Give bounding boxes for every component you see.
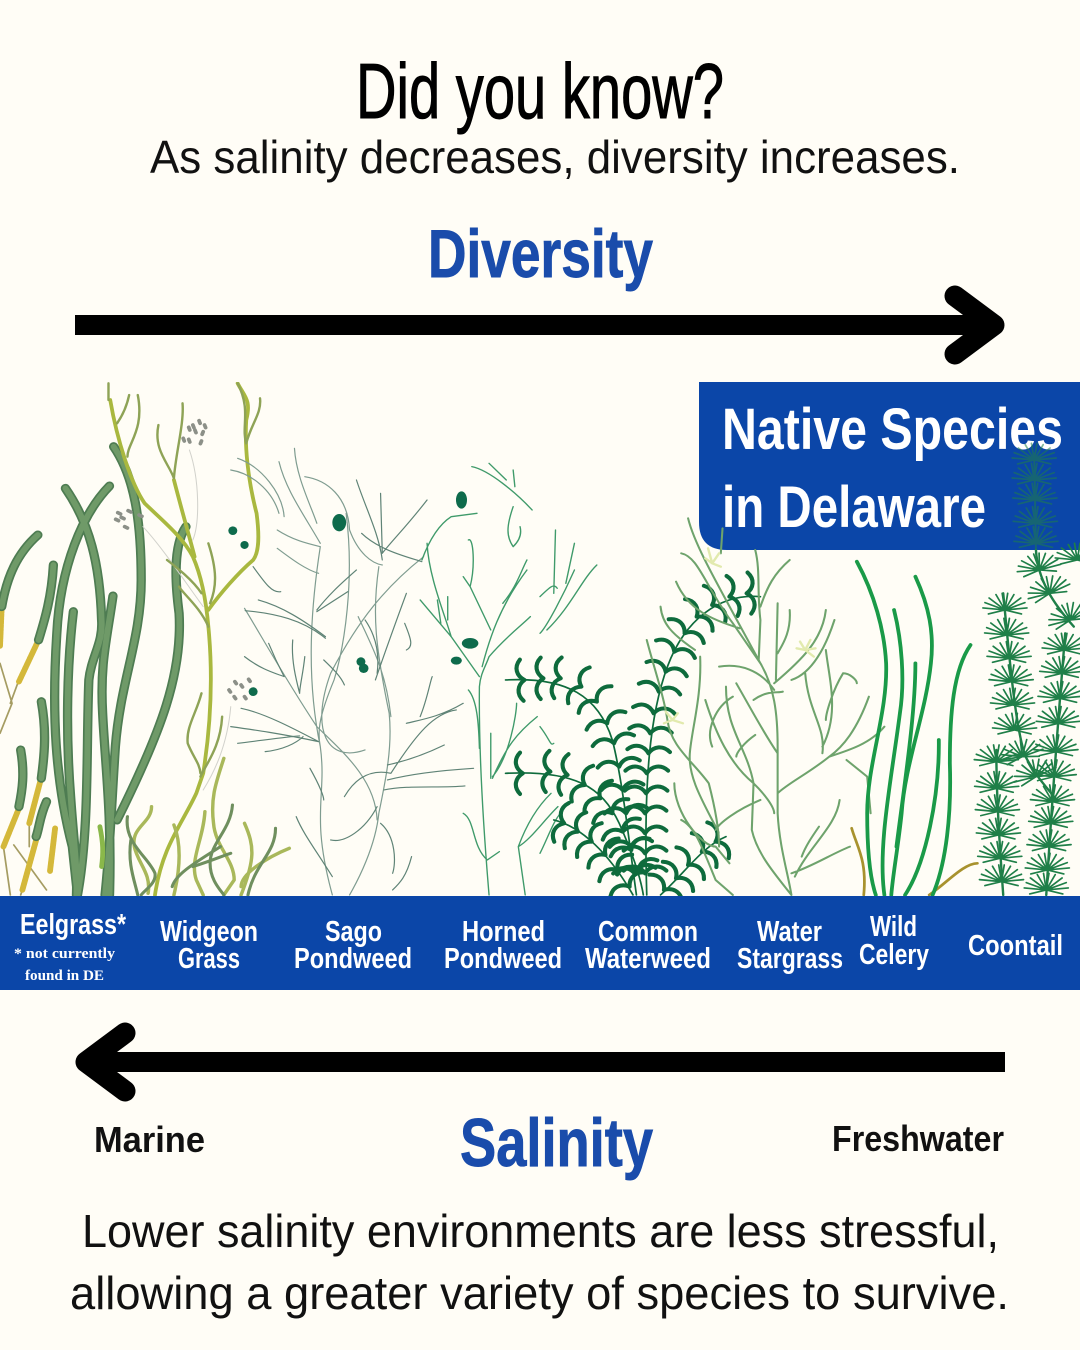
- plant: horned pondweed: [420, 463, 558, 895]
- subtitle: As salinity decreases, diversity increases.: [150, 131, 960, 183]
- plant: common waterweed: [506, 572, 760, 903]
- panel: species labels band: [0, 896, 1080, 990]
- banner heading: in Delaware: [722, 475, 986, 540]
- label: sago pondweed: [294, 916, 412, 975]
- label: eelgrass: [14, 909, 127, 984]
- label: sago pondweed: Pondweed: [294, 943, 412, 975]
- label: eelgrass: * not currently: [14, 946, 116, 962]
- label: water stargrass: [737, 916, 843, 975]
- label: sago pondweed: Sago: [325, 916, 382, 948]
- label: wild celery: Wild: [870, 911, 917, 943]
- banner heading: [722, 397, 1063, 540]
- label: horned pondweed: Horned: [462, 916, 545, 948]
- title: Did you know?: [356, 47, 724, 135]
- panel: native species banner: [699, 382, 1080, 550]
- label: widgeon grass: Grass: [178, 943, 240, 975]
- heading: salinity: Salinity: [460, 1105, 653, 1181]
- label: marine: Marine: [94, 1119, 205, 1160]
- arrow: salinity, pointing left: [86, 1033, 1005, 1091]
- plant: coontail: [974, 443, 1080, 895]
- plant: wild celery: [852, 562, 977, 895]
- heading: diversity: Diversity: [428, 216, 653, 292]
- text: closing explanation: Lower salinity environments are less stressful,: [82, 1205, 999, 1257]
- arrow: diversity, pointing right: [75, 296, 994, 354]
- label: horned pondweed: [444, 916, 562, 975]
- illustration: seagrass species: [0, 383, 1080, 903]
- plant: eelgrass: [0, 447, 186, 895]
- label: water stargrass: Stargrass: [737, 943, 843, 975]
- label: widgeon grass: [160, 916, 258, 975]
- plant: widgeon grass: [108, 383, 289, 895]
- label: widgeon grass: Widgeon: [160, 916, 258, 948]
- label: water stargrass: Water: [757, 916, 822, 948]
- plant: water stargrass: [647, 518, 884, 895]
- label: common waterweed: [585, 916, 711, 975]
- label: wild celery: [859, 911, 929, 971]
- label: eelgrass: found in DE: [25, 968, 104, 984]
- plant: sago pondweed: [228, 448, 474, 895]
- label: common waterweed: Waterweed: [585, 943, 711, 975]
- label: freshwater: Freshwater: [832, 1118, 1004, 1159]
- label: horned pondweed: Pondweed: [444, 943, 562, 975]
- text: closing explanation: [70, 1205, 1009, 1319]
- label: common waterweed: Common: [598, 916, 698, 948]
- label: wild celery: Celery: [859, 939, 929, 971]
- text: closing explanation: allowing a greater variety of species to survive.: [70, 1267, 1009, 1319]
- label: eelgrass: Eelgrass*: [20, 909, 127, 941]
